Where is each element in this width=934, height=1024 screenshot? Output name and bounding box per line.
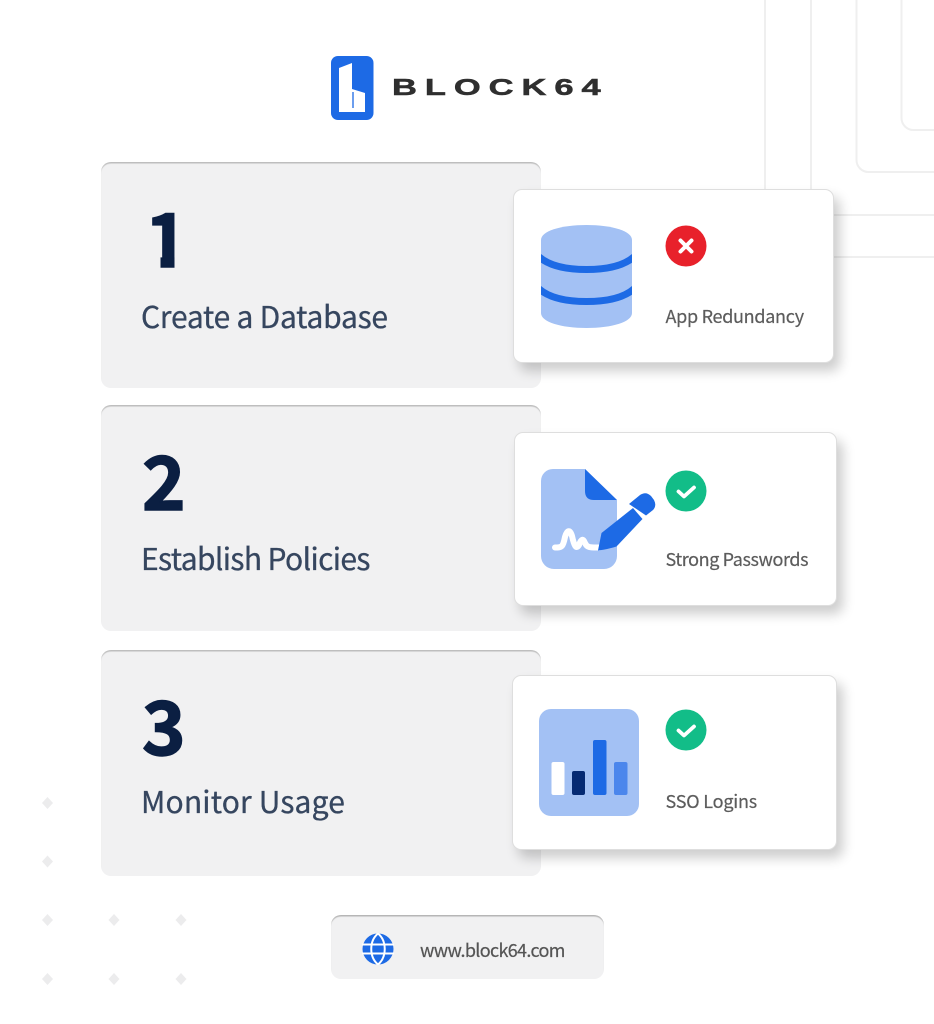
panel: step 3 — [101, 650, 541, 876]
step number 2: 2 — [142, 425, 186, 532]
logo wordmark: BLOCK64 — [392, 74, 609, 100]
card: SSO Logins — [512, 675, 837, 850]
step title: Monitor Usage — [141, 778, 345, 822]
icon: database — [541, 225, 632, 328]
website pill — [331, 915, 604, 979]
icon: green check badge — [666, 470, 706, 512]
icon: bar chart — [539, 709, 639, 816]
panel: step 2 — [101, 405, 541, 631]
website url: www.block64.com — [420, 937, 565, 963]
icon: globe — [362, 933, 394, 965]
logo — [331, 56, 609, 120]
background dot pattern — [42, 797, 186, 985]
label: Strong Passwords — [666, 546, 808, 572]
panel: step 1 — [101, 162, 541, 388]
icon: green check badge — [666, 710, 706, 750]
background line pattern — [764, 0, 934, 258]
step number 1: 1 — [145, 182, 189, 289]
label: SSO Logins — [666, 788, 757, 814]
card: App Redundancy — [513, 189, 834, 363]
icon: signed document with pen — [541, 469, 656, 569]
step title: Establish Policies — [141, 535, 370, 579]
step number 3: 3 — [142, 670, 186, 777]
label: App Redundancy — [666, 302, 804, 328]
card: Strong Passwords — [514, 432, 837, 606]
icon: red cross badge — [666, 226, 706, 266]
step title: Create a Database — [141, 293, 388, 337]
icon: Block64 building mark — [331, 56, 374, 120]
